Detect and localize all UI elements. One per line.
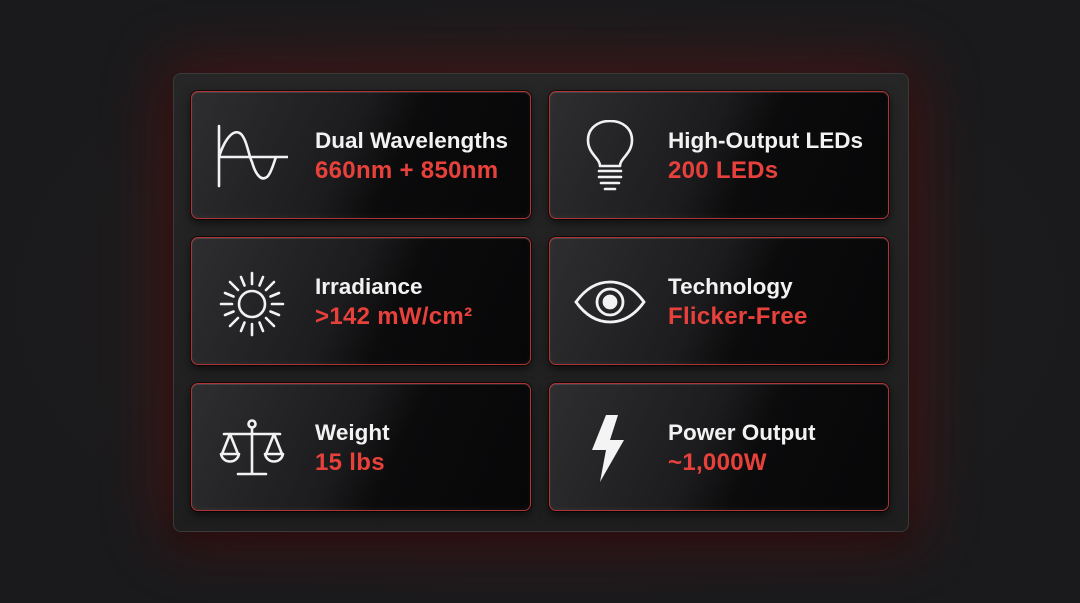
value: >142 mW/cm² (315, 303, 472, 330)
heading: Weight (315, 420, 390, 445)
value: ~1,000W (668, 449, 767, 476)
card: technology (549, 237, 889, 365)
heading: Irradiance (315, 274, 423, 299)
value: 15 lbs (315, 449, 385, 476)
value: 200 LEDs (668, 157, 778, 184)
heading: High-Output LEDs (668, 128, 863, 153)
icon: sine wave (218, 124, 288, 188)
heading: Power Output (668, 420, 816, 445)
heading: Dual Wavelengths (315, 128, 508, 153)
card: high-output LEDs (549, 91, 889, 219)
icon: light bulb (586, 120, 634, 190)
heading: Technology (668, 274, 793, 299)
card: power output (549, 383, 889, 511)
value: 660nm + 850nm (315, 157, 498, 184)
icon: lightning bolt (592, 415, 624, 482)
value: Flicker-Free (668, 303, 808, 330)
card: dual wavelengths (191, 91, 531, 219)
card: irradiance (191, 237, 531, 365)
icon: eye (574, 280, 646, 324)
icon: sun (220, 272, 284, 336)
panel: spec board (173, 73, 909, 532)
icon: scale (220, 419, 284, 476)
card: weight (191, 383, 531, 511)
